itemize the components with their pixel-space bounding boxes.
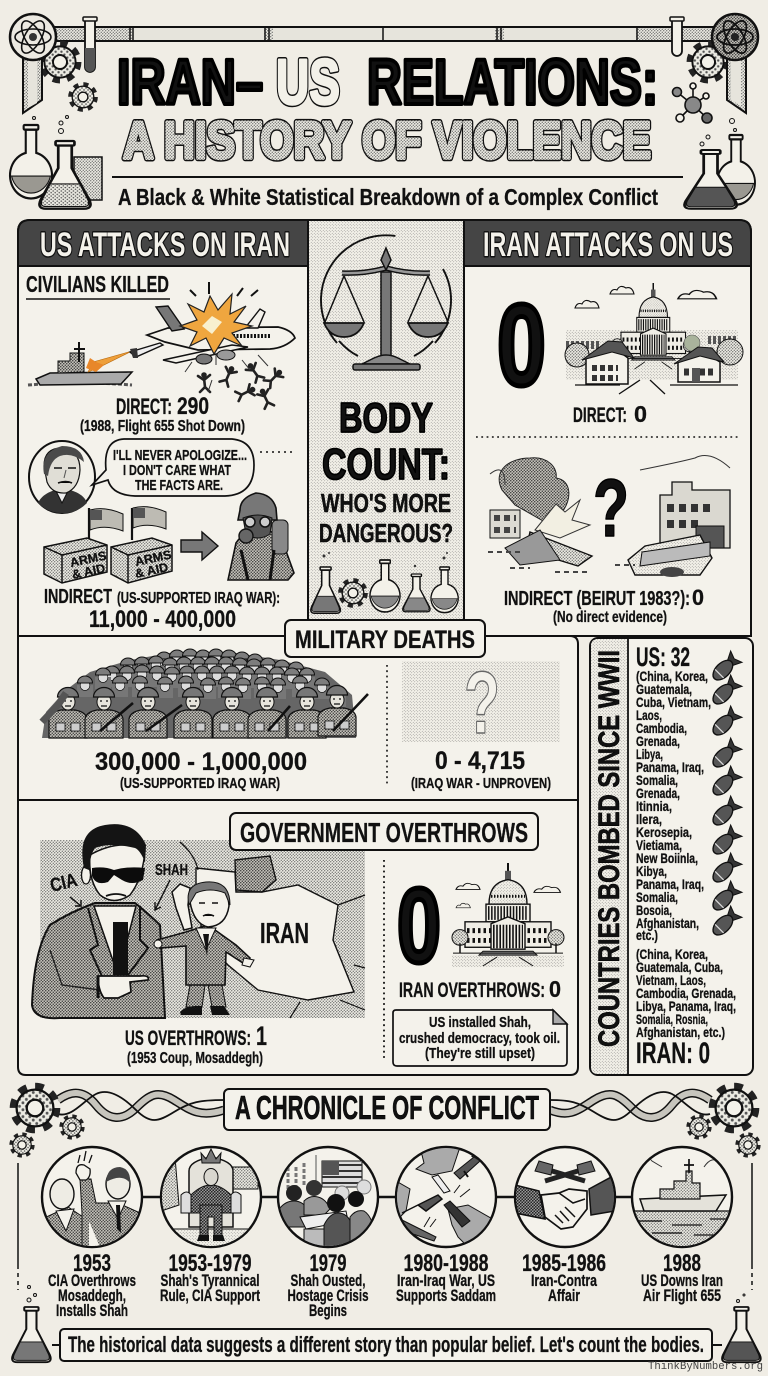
caption 1985-1986: Affair bbox=[548, 1286, 580, 1305]
list: countries bombed: Laos, bbox=[636, 707, 662, 723]
stat: Iran overthrows: 0 bbox=[549, 976, 561, 1002]
caption 1988 bbox=[641, 1250, 723, 1305]
icon: flags and arms boxes: & AID bbox=[134, 560, 169, 581]
list: countries bombed: New Boiinla, bbox=[636, 850, 698, 866]
stat: indirect Beirut: 0 bbox=[692, 585, 704, 610]
list: countries bombed: Itinnia, bbox=[636, 798, 672, 814]
stat: military deaths Iran bbox=[95, 748, 307, 792]
list: countries bombed: Somalia, bbox=[636, 889, 678, 905]
icon: warship firing missile bbox=[28, 342, 163, 385]
watermark: ThinkByNumbers.org bbox=[648, 1361, 763, 1373]
icon: flags and arms boxes: ARMS bbox=[69, 549, 108, 570]
big zero direct: 0 bbox=[497, 280, 546, 410]
list: countries bombed: Grenada, bbox=[636, 785, 680, 801]
stat: military deaths Iran: (US-SUPPORTED IRAQ WAR) bbox=[120, 775, 280, 792]
panel: US attacks on Iran bbox=[18, 220, 308, 636]
note: US installed Shah: crushed democracy, took oil. bbox=[399, 1030, 560, 1047]
caption 1980-1988: Supports Saddam bbox=[396, 1286, 496, 1305]
bottom flasks bbox=[12, 1286, 761, 1362]
timeline: 1953-1979 bbox=[161, 1147, 261, 1247]
stat: indirect civilians: INDIRECT bbox=[44, 586, 112, 608]
stat: direct 290: (1988, Flight 655 Shot Down) bbox=[80, 418, 245, 435]
icon: capitol bbox=[452, 863, 564, 967]
note: US installed Shah: US installed Shah, bbox=[429, 1014, 531, 1031]
stat: US overthrows bbox=[125, 1021, 267, 1067]
label: Iran: IRAN bbox=[260, 918, 309, 950]
note: US installed Shah: (They're still upset) bbox=[425, 1045, 535, 1062]
stat: US overthrows: US OVERTHROWS: bbox=[125, 1027, 251, 1050]
heading: body count: WHO'S MORE bbox=[321, 488, 451, 518]
caption 1953-1979: 1953-1979 bbox=[168, 1250, 252, 1277]
list: countries bombed: Ilera, bbox=[636, 811, 662, 827]
caption 1980-1988: 1980-1988 bbox=[404, 1250, 488, 1277]
caption 1985-1986 bbox=[522, 1250, 606, 1305]
unknown deaths question mark panel bbox=[402, 653, 560, 752]
right arm and gear bbox=[690, 44, 746, 113]
speech bubble: I DON'T CARE WHAT bbox=[123, 463, 231, 479]
big zero overthrows: 0 bbox=[397, 867, 441, 985]
icon: soldier in gas mask bbox=[228, 493, 294, 580]
timeline: 1953 bbox=[42, 1147, 142, 1247]
caption 1988: Air Flight 655 bbox=[643, 1286, 721, 1305]
list: countries bombed repeat: Libya, Panama, Iraq, bbox=[636, 998, 736, 1014]
heading: body count: DANGEROUS? bbox=[319, 518, 453, 548]
list: countries bombed: Vietiama, bbox=[636, 837, 682, 853]
icon: test tube left bbox=[83, 17, 97, 72]
unknown deaths question mark panel: ? bbox=[464, 653, 500, 752]
map of Iran bbox=[40, 840, 365, 1018]
left arm and gear bbox=[23, 44, 78, 113]
speech bubble: THE FACTS ARE. bbox=[135, 478, 223, 494]
list: countries bombed: (China, Korea, bbox=[636, 668, 708, 684]
title: US bbox=[276, 46, 340, 118]
list: countries bombed: Cuba, Vietnam, bbox=[636, 694, 711, 710]
caption 1985-1986: Iran-Contra bbox=[531, 1271, 597, 1290]
labels: CIA and Shah: SHAH bbox=[155, 862, 188, 879]
right flasks bbox=[685, 118, 755, 209]
label: military deaths: MILITARY DEATHS bbox=[295, 626, 475, 654]
label: government overthrows: GOVERNMENT OVERTHROWS bbox=[240, 817, 528, 848]
caption 1979: Shah Ousted, bbox=[290, 1271, 366, 1290]
icon: molecule bbox=[672, 83, 712, 123]
title: IRAN– bbox=[117, 46, 263, 118]
list: countries bombed repeat: Vietnam, Laos, bbox=[636, 972, 706, 988]
stat: indirect civilians: (US-SUPPORTED IRAQ WAR): bbox=[117, 590, 280, 607]
list: countries bombed bbox=[636, 668, 711, 943]
caption 1953-1979 bbox=[160, 1250, 260, 1305]
title: US bbox=[276, 46, 340, 118]
icon: flags and arms boxes: & AID bbox=[71, 561, 106, 582]
label: government overthrows bbox=[230, 813, 538, 850]
caption 1985-1986: 1985-1986 bbox=[522, 1250, 606, 1277]
stat: US overthrows: 1 bbox=[256, 1021, 267, 1051]
timeline: 1979 bbox=[278, 1147, 378, 1247]
stat: Iran overthrows bbox=[399, 976, 561, 1002]
stat: indirect Beirut: INDIRECT (BEIRUT 1983?): bbox=[504, 588, 690, 610]
icon: bombed buildings with question mark bbox=[488, 456, 730, 577]
subtitle: A Black & White Statistical Breakdown of a Complex Conflict bbox=[118, 184, 658, 210]
timeline connector bbox=[92, 1196, 682, 1198]
stat: military deaths US: 0 - 4,715 bbox=[435, 747, 525, 775]
caption 1979: Hostage Crisis bbox=[288, 1286, 368, 1305]
icon: capitol and suburban houses bbox=[565, 283, 743, 394]
stat: military deaths US bbox=[411, 747, 551, 792]
stat: direct 290: DIRECT: bbox=[116, 394, 172, 419]
panel: Iran attacks on US bbox=[464, 220, 751, 636]
caption 1980-1988 bbox=[396, 1250, 496, 1305]
stat: direct 0: DIRECT: bbox=[573, 404, 627, 427]
chronicle decoration: waves and gears bbox=[11, 1086, 759, 1290]
timeline: 1980-1988 bbox=[396, 1147, 496, 1247]
list: countries bombed: Afghanistan, bbox=[636, 915, 699, 931]
caption 1953: CIA Overthrows bbox=[48, 1271, 136, 1290]
pipe bbox=[48, 27, 722, 41]
figure: Shah bbox=[154, 882, 254, 1015]
list: countries bombed: Panama, Iraq, bbox=[636, 876, 704, 892]
heading: US attacks on Iran bbox=[18, 220, 308, 266]
panel: body count bbox=[308, 220, 464, 625]
icon: atom right bbox=[712, 14, 758, 60]
labels: CIA and Shah bbox=[48, 862, 188, 910]
title bbox=[117, 46, 658, 170]
stat: US overthrows: (1953 Coup, Mosaddegh) bbox=[127, 1050, 263, 1067]
caption 1953-1979: Shah's Tyrannical bbox=[160, 1271, 260, 1290]
heading: body count: BODY bbox=[339, 394, 433, 441]
header decoration: pipes and lab icons bbox=[10, 14, 758, 209]
heading: body count bbox=[319, 394, 453, 548]
timeline: 1985-1986 bbox=[515, 1147, 615, 1247]
list: countries bombed: Guatemala, bbox=[636, 681, 692, 697]
stat: direct 0: 0 bbox=[634, 401, 647, 427]
icons: bombs bbox=[709, 651, 742, 939]
caption 1988: US Downs Iran bbox=[641, 1271, 723, 1290]
list: countries bombed: Kerosepia, bbox=[636, 824, 692, 840]
list: countries bombed: Panama, Iraq, bbox=[636, 759, 704, 775]
caption 1953: Installs Shah bbox=[56, 1301, 128, 1320]
title: RELATIONS: bbox=[367, 46, 658, 118]
icon: soldier crowd bbox=[42, 649, 368, 738]
list: countries bombed: Kibya, bbox=[636, 863, 667, 879]
list: countries bombed: Bosoia, bbox=[636, 902, 672, 918]
left flasks and beaker bbox=[10, 116, 102, 209]
timeline captions: years and events bbox=[48, 1250, 723, 1320]
stat: Iran 0: IRAN: 0 bbox=[636, 1037, 710, 1070]
stat: direct 290: 290 bbox=[177, 393, 209, 420]
icon: test tube right bbox=[670, 17, 684, 56]
list: countries bombed repeat: Guatemala, Cuba, bbox=[636, 959, 723, 975]
list: countries bombed repeat bbox=[636, 946, 736, 1040]
vertical heading strip: COUNTRIES BOMBED SINCE WWII bbox=[593, 650, 626, 1047]
list: countries bombed: Grenada, bbox=[636, 733, 680, 749]
list: countries bombed: Cambodia, bbox=[636, 720, 687, 736]
label: civilians killed: CIVILIANS KILLED bbox=[26, 271, 169, 297]
stat: US 32: US: 32 bbox=[636, 642, 690, 672]
list: countries bombed repeat: Somalia, Rosnia, bbox=[636, 1011, 708, 1027]
stat: military deaths US: (IRAQ WAR - UNPROVEN) bbox=[411, 775, 551, 792]
labels: CIA and Shah: CIA bbox=[48, 870, 80, 897]
stat: indirect civilians bbox=[44, 586, 280, 633]
icon: flags and arms boxes: ARMS bbox=[134, 548, 173, 569]
heading: body count: COUNT: bbox=[322, 440, 450, 489]
label: military deaths bbox=[285, 620, 485, 657]
heading: chronicle of conflict: A CHRONICLE OF CONFLICT bbox=[235, 1089, 539, 1126]
title: A HISTORY OF VIOLENCE bbox=[123, 112, 651, 170]
caption 1980-1988: Iran-Iraq War, US bbox=[397, 1271, 495, 1290]
speech bubble bbox=[92, 439, 254, 496]
icon: flags and arms boxes bbox=[44, 507, 173, 583]
stat: direct 290 bbox=[80, 393, 245, 435]
list: countries bombed: Somalia, bbox=[636, 772, 678, 788]
panel: military deaths bbox=[18, 620, 578, 800]
caption 1979 bbox=[288, 1250, 368, 1320]
list: countries bombed: Libya, bbox=[636, 746, 663, 762]
icon: balance scales bbox=[321, 235, 451, 370]
icon: airliner explosion bbox=[147, 282, 295, 364]
caption 1953: Mosaddegh, bbox=[58, 1286, 126, 1305]
list: countries bombed repeat: Afghanistan, etc.) bbox=[636, 1024, 725, 1040]
figure: CIA agent bbox=[32, 824, 165, 1018]
portrait: Bush bbox=[29, 441, 95, 513]
timeline: 1988 bbox=[632, 1147, 732, 1247]
stat: Iran overthrows: IRAN OVERTHROWS: bbox=[399, 979, 545, 1002]
list: countries bombed repeat: (China, Korea, bbox=[636, 946, 708, 962]
panel: government overthrows bbox=[18, 800, 578, 1075]
speech bubble: I'LL NEVER APOLOGIZE... bbox=[113, 448, 247, 464]
stat: indirect Beirut: (No direct evidence) bbox=[553, 609, 667, 626]
caption 1953: 1953 bbox=[73, 1250, 111, 1277]
icons: flasks and gear bbox=[311, 552, 458, 613]
caption 1979: 1979 bbox=[310, 1250, 346, 1277]
caption 1979: Begins bbox=[309, 1301, 347, 1320]
note: US installed Shah bbox=[393, 1010, 567, 1066]
title: A HISTORY OF VIOLENCE bbox=[123, 112, 651, 170]
heading: chronicle of conflict bbox=[224, 1089, 550, 1130]
icon: atom left bbox=[10, 14, 56, 60]
stat: indirect civilians: 11,000 - 400,000 bbox=[89, 606, 236, 633]
arrow bbox=[181, 532, 218, 560]
icon: falling passengers bbox=[185, 355, 285, 409]
stat: military deaths Iran: 300,000 - 1,000,000 bbox=[95, 748, 307, 776]
heading: US attacks on Iran: US ATTACKS ON IRAN bbox=[40, 226, 290, 264]
caption 1953 bbox=[48, 1250, 136, 1320]
icon: small gear bbox=[70, 84, 96, 110]
list: countries bombed: etc.) bbox=[636, 927, 658, 943]
icon: bombed buildings with question mark: ? bbox=[593, 463, 629, 554]
panel: countries bombed since WWII bbox=[590, 638, 753, 1075]
caption 1988: 1988 bbox=[663, 1250, 701, 1277]
caption 1953-1979: Rule, CIA Support bbox=[160, 1286, 260, 1305]
stat: indirect Beirut bbox=[504, 585, 704, 626]
